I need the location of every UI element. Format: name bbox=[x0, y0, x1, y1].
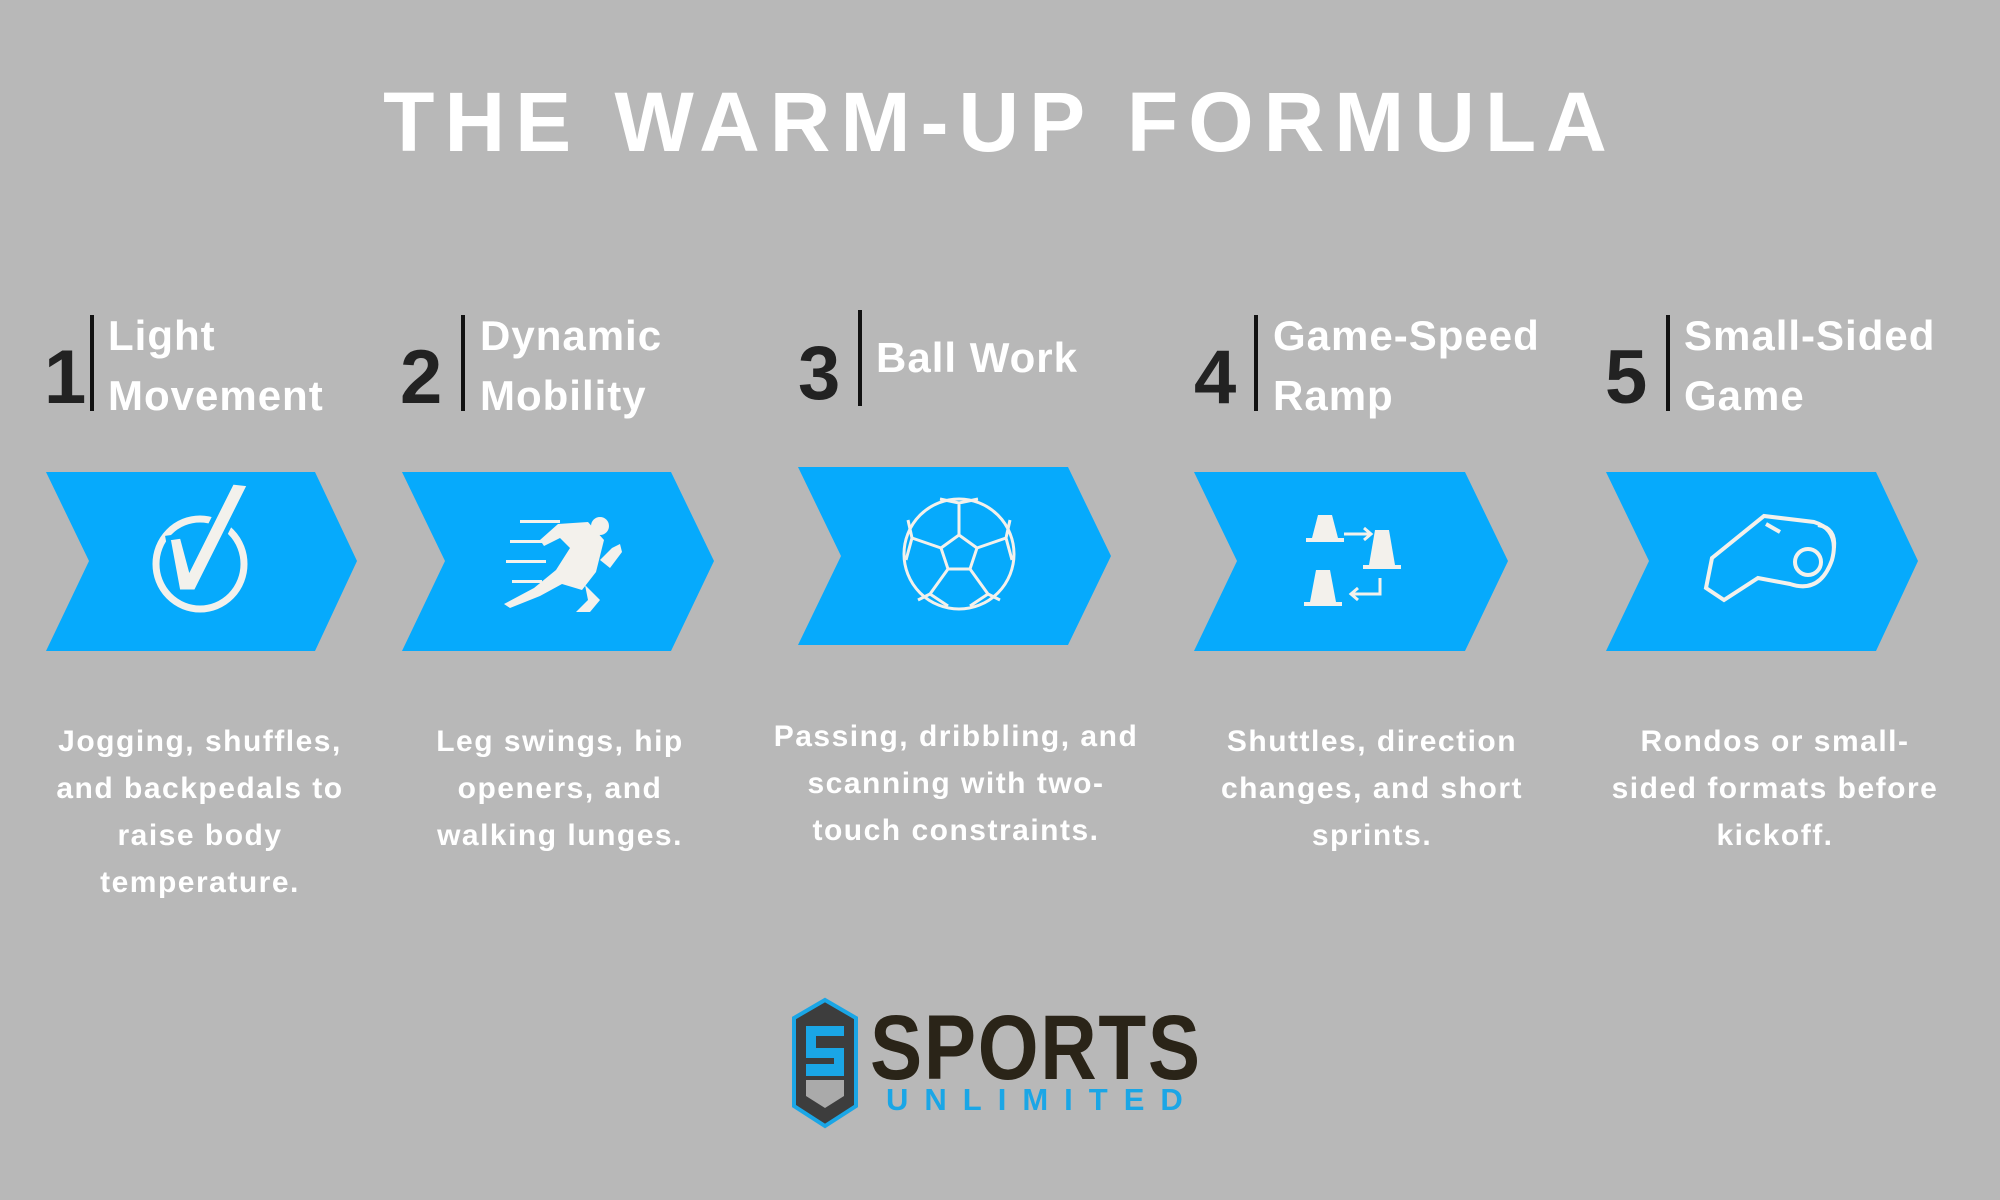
step 5 heading bbox=[1605, 312, 1935, 420]
description 5: Rondos or small- bbox=[1640, 725, 1910, 758]
number 1: 1 bbox=[44, 335, 86, 420]
heading text 1: Light bbox=[108, 312, 216, 359]
icon: check circle bbox=[156, 519, 244, 609]
description 2: Leg swings, hip bbox=[436, 725, 684, 758]
heading text 5: Game bbox=[1684, 372, 1805, 419]
description 3: scanning with two- bbox=[808, 767, 1104, 800]
description 3: Passing, dribbling, and bbox=[774, 720, 1138, 753]
title: THE WARM-UP FORMULA bbox=[383, 75, 1617, 169]
heading text 3: Ball Work bbox=[876, 334, 1078, 381]
logo emblem bbox=[792, 998, 858, 1128]
description 5: kickoff. bbox=[1716, 819, 1834, 852]
chevron 2 bbox=[402, 472, 714, 651]
description 1: temperature. bbox=[100, 866, 300, 899]
heading text 2: Mobility bbox=[480, 372, 647, 419]
step 4 heading bbox=[1194, 312, 1540, 420]
description 1 bbox=[56, 725, 344, 899]
step 1 heading bbox=[44, 312, 324, 420]
description 2 bbox=[436, 725, 684, 852]
icon: runner bbox=[504, 517, 622, 612]
description 1: and backpedals to bbox=[56, 772, 344, 805]
chevron 4 bbox=[1194, 472, 1508, 651]
chevron 3 bbox=[798, 467, 1111, 645]
heading text 4: Ramp bbox=[1273, 372, 1394, 419]
description 4: changes, and short bbox=[1221, 772, 1523, 805]
number 2: 2 bbox=[400, 335, 442, 420]
number 5: 5 bbox=[1605, 335, 1647, 420]
description 5: sided formats before bbox=[1612, 772, 1938, 805]
icon: soccer ball bbox=[904, 499, 1014, 609]
description 4: sprints. bbox=[1312, 819, 1432, 852]
number 3: 3 bbox=[798, 331, 840, 416]
heading text 5: Small-Sided bbox=[1684, 312, 1935, 359]
heading text 1 bbox=[108, 312, 324, 419]
heading text 2 bbox=[480, 312, 662, 419]
description 1: Jogging, shuffles, bbox=[58, 725, 342, 758]
heading text 4: Game-Speed bbox=[1273, 312, 1540, 359]
chevron 1 bbox=[46, 472, 357, 651]
heading text 1: Movement bbox=[108, 372, 324, 419]
chevron 5 bbox=[1606, 472, 1918, 651]
icon: cones and arrows bbox=[1304, 515, 1401, 606]
step 3 heading bbox=[798, 310, 1078, 416]
number 4: 4 bbox=[1194, 335, 1236, 420]
description 4: Shuttles, direction bbox=[1227, 725, 1517, 758]
logo wordmark UNLIMITED: UNLIMITED bbox=[886, 1082, 1199, 1117]
heading text 4 bbox=[1273, 312, 1540, 419]
icon: whistle bbox=[1706, 516, 1834, 600]
description 5 bbox=[1612, 725, 1938, 852]
heading text 5 bbox=[1684, 312, 1935, 419]
description 4 bbox=[1221, 725, 1523, 852]
description 2: walking lunges. bbox=[437, 819, 683, 852]
description 2: openers, and bbox=[458, 772, 662, 805]
logo wordmark SPORTS: SPORTS bbox=[870, 997, 1202, 1099]
description 3: touch constraints. bbox=[812, 814, 1100, 847]
heading text 2: Dynamic bbox=[480, 312, 662, 359]
description 1: raise body bbox=[117, 819, 283, 852]
step 2 heading bbox=[400, 312, 662, 420]
description 3 bbox=[774, 720, 1138, 847]
logo: Sports Unlimited bbox=[792, 997, 1202, 1128]
